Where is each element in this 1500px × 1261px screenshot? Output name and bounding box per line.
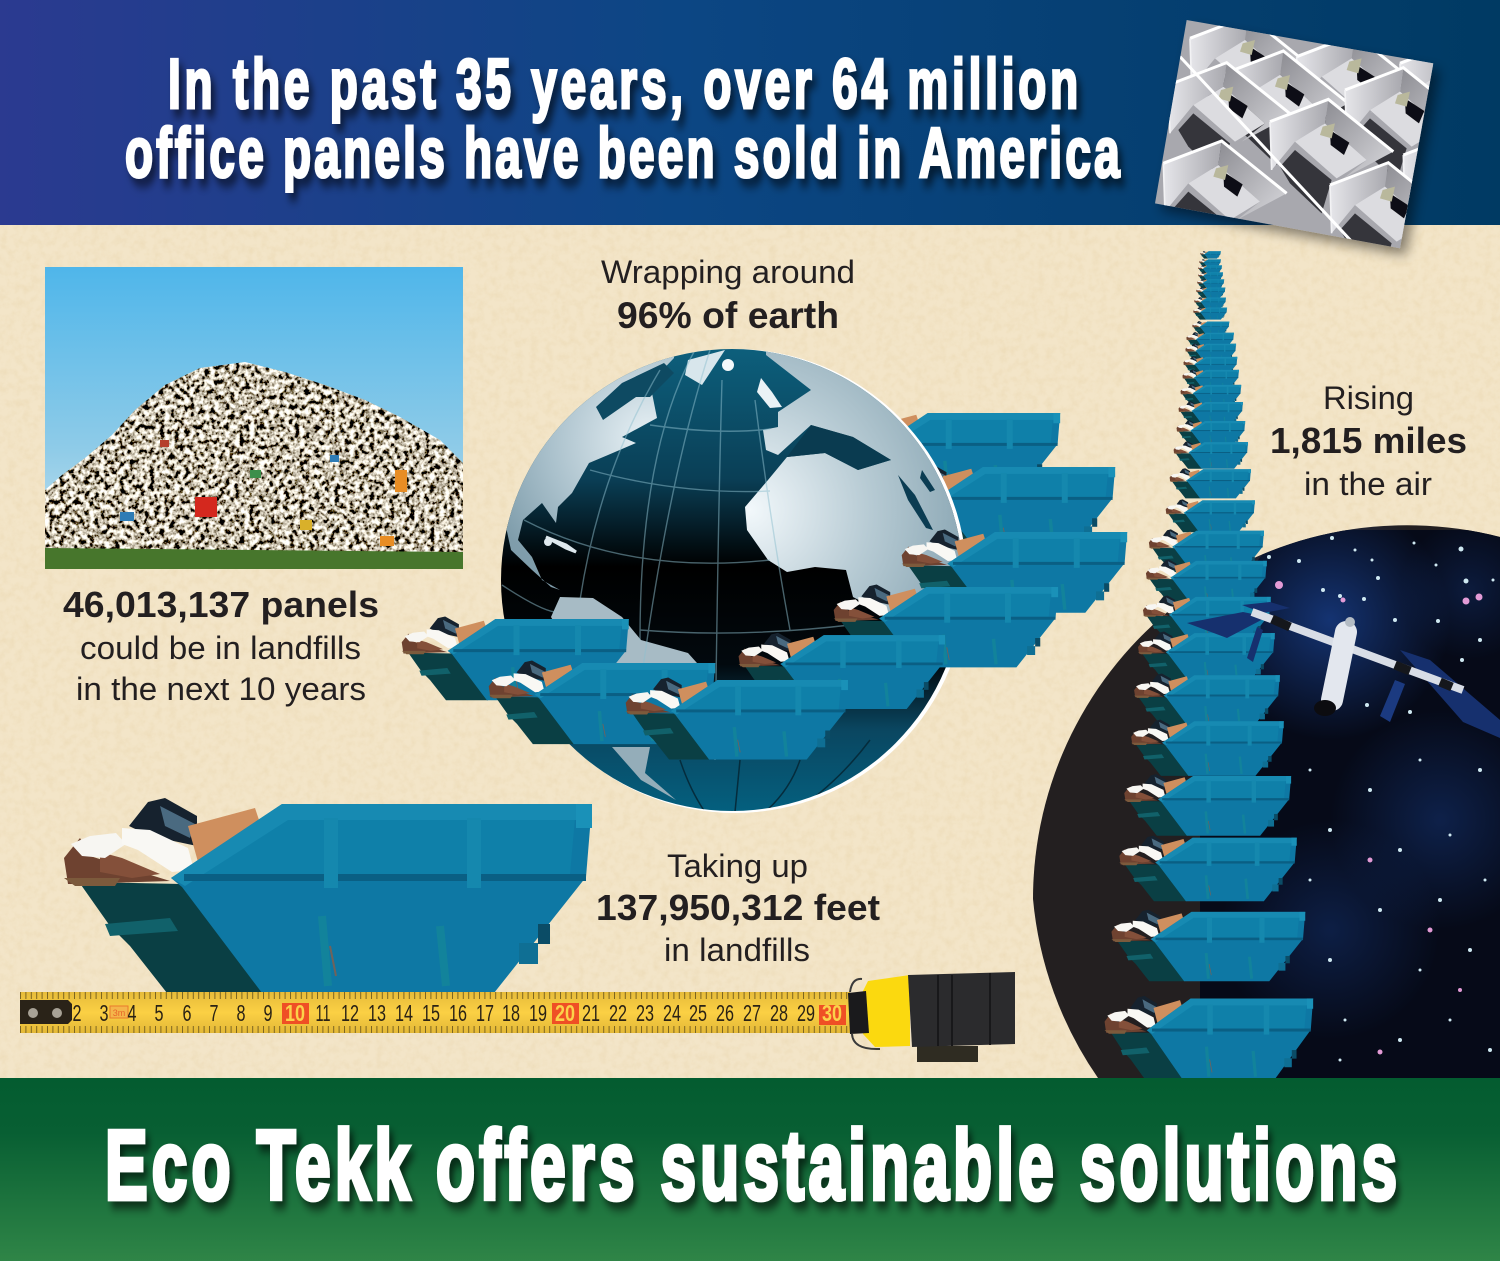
text: taking up feet: 137,950,312 feet [596, 887, 880, 928]
heading: office panels sold: In the past 35 years, over 64 million [168, 44, 1078, 123]
tape measure: 10 [285, 1000, 305, 1026]
text: rising miles: Rising [1323, 380, 1414, 416]
text: taking up feet [596, 848, 880, 968]
tape measure: 3m [113, 1008, 125, 1018]
text: wrapping around earth: Wrapping around [601, 254, 855, 290]
text: landfill panels: could be in landfills [80, 630, 361, 666]
globe [490, 340, 975, 813]
text: wrapping around earth [601, 254, 855, 336]
tape measure: 18 [502, 1000, 520, 1026]
dumpsters behind globe [835, 410, 1115, 548]
tape measure: 30 [822, 1000, 842, 1026]
text: taking up feet: in landfills [664, 932, 810, 968]
tape measure: 24 [663, 1000, 681, 1026]
photo: office cubicles [1155, 20, 1443, 262]
space background [1030, 500, 1500, 1080]
tape measure: 3 [100, 1000, 108, 1026]
tape measure: 11 [316, 1000, 330, 1026]
tape measure: 17 [476, 1000, 494, 1026]
tape measure: 25 [689, 1000, 707, 1026]
tape measure: 28 [770, 1000, 788, 1026]
tape measure: 15 [422, 1000, 440, 1026]
text: landfill panels: in the next 10 years [76, 671, 366, 707]
tape measure: 23 [636, 1000, 654, 1026]
tape measure: 22 [609, 1000, 627, 1026]
tape measure [20, 972, 1015, 1062]
text: rising miles: in the air [1304, 466, 1432, 502]
tape measure: 8 [236, 1000, 246, 1026]
dumpster tower [1105, 251, 1313, 1080]
tape measure: 5 [154, 1000, 164, 1026]
photo: landfill heap [45, 267, 463, 569]
tape measure: 13 [368, 1000, 386, 1026]
paper background [0, 225, 1500, 1079]
tape measure: 19 [529, 1000, 547, 1026]
tape measure: 29 [797, 1000, 815, 1026]
text: taking up feet: Taking up [667, 848, 808, 884]
text: landfill panels [63, 584, 379, 707]
tape measure: 27 [743, 1000, 761, 1026]
text: rising miles [1270, 380, 1467, 502]
space station [1187, 602, 1500, 738]
footer banner [0, 1078, 1500, 1261]
tape measure: 16 [449, 1000, 467, 1026]
heading: office panels sold [125, 44, 1120, 192]
header banner [0, 0, 1500, 225]
tape measure: 7 [210, 1000, 218, 1026]
heading: office panels sold: office panels have been sold in America [125, 113, 1120, 192]
large dumpster [64, 798, 592, 993]
tape measure: 26 [716, 1000, 734, 1026]
tape measure: 14 [395, 1000, 413, 1026]
tape measure: 12 [341, 1000, 359, 1026]
text: wrapping around earth: 96% of earth [617, 295, 839, 336]
text: rising miles: 1,815 miles [1270, 420, 1467, 461]
tape measure: 6 [182, 1000, 192, 1026]
dumpsters stacked in front of globe [402, 529, 1127, 760]
footer heading: Eco Tekk offers sustainable solutions [105, 1110, 1397, 1220]
tape measure: 2 [72, 1000, 82, 1026]
tape measure: 21 [582, 1000, 600, 1026]
tape measure: 4 [128, 1000, 137, 1026]
tape measure: 9 [264, 1000, 272, 1026]
tape measure: 20 [555, 1000, 575, 1026]
text: landfill panels: 46,013,137 panels [63, 584, 379, 625]
